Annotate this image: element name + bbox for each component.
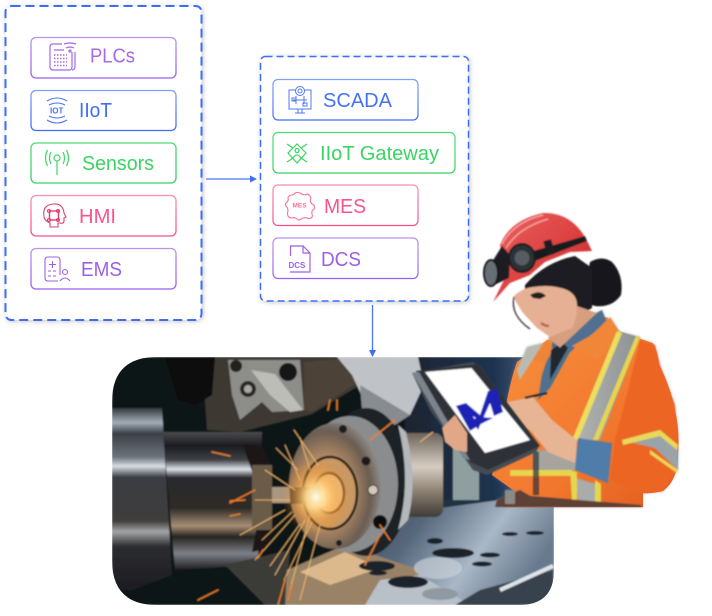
forearm and hand [503, 397, 577, 463]
rear hub [406, 432, 444, 518]
icon: calculator user [45, 257, 70, 281]
large cylinders [112, 408, 172, 590]
hair [525, 256, 592, 320]
pill: IIoT Gateway [273, 132, 455, 173]
machine head [203, 357, 362, 432]
panel: control systems [260, 56, 468, 301]
face [513, 286, 577, 337]
arrow: field devices to control systems [206, 176, 257, 182]
left strap [517, 343, 543, 380]
icon: MES gear: MES [292, 202, 307, 210]
worker body [492, 310, 679, 507]
collar and shirt [538, 310, 607, 400]
arrow: control systems to machine [369, 305, 376, 357]
head [484, 213, 622, 348]
label: PLCs: PLCs [90, 46, 135, 68]
label: DCS: DCS [321, 249, 361, 271]
icon: gateway [287, 144, 307, 163]
table plate [374, 499, 554, 602]
icon: DCS file [288, 246, 310, 272]
icon: SCADA monitor [289, 86, 311, 113]
sleeve [610, 340, 678, 493]
tablet [412, 362, 540, 475]
chest strap [572, 331, 640, 440]
icon: IoT waves [47, 98, 67, 123]
background right [404, 357, 523, 500]
hair bun [582, 258, 622, 306]
lower bed [225, 550, 290, 605]
sparks [240, 430, 320, 600]
icon: PLC keypad [50, 43, 76, 70]
left hand [442, 415, 467, 452]
pill: MES [273, 185, 418, 226]
cuff [575, 438, 612, 483]
glow [283, 460, 346, 532]
label: SCADA: SCADA [323, 90, 393, 112]
label: MES: MES [324, 196, 366, 218]
icon: IoT waves: IOT [50, 106, 63, 116]
pen [525, 393, 547, 398]
spindle ring [346, 407, 406, 557]
pill: PLCs [31, 38, 176, 78]
goggles [509, 244, 535, 272]
pill: HMI [31, 196, 176, 236]
label: Sensors: Sensors [82, 153, 154, 175]
label: IIoT: IIoT [79, 100, 112, 122]
photo: CNC machine with sparks [112, 357, 554, 605]
disc face [289, 423, 381, 549]
pill: IIoT [31, 90, 176, 130]
figure: engineer with tablet [412, 213, 679, 507]
icon: MES gear [286, 192, 314, 220]
icon: DCS file: DCS [288, 261, 306, 270]
pill: EMS [31, 248, 176, 289]
panel: field devices [6, 6, 202, 320]
plate holes [359, 531, 544, 588]
hard hat [493, 213, 592, 302]
label: EMS: EMS [81, 259, 122, 281]
icon: antenna [46, 150, 68, 175]
lower stripe [533, 450, 578, 470]
neck [548, 305, 597, 348]
pill: Sensors [31, 143, 176, 183]
belt [495, 490, 643, 507]
tablet logo [456, 389, 503, 431]
label: HMI: HMI [79, 206, 116, 228]
label: IIoT Gateway: IIoT Gateway [320, 143, 439, 165]
collar [243, 444, 274, 552]
pill: DCS [273, 238, 418, 278]
pill: SCADA [273, 80, 418, 120]
icon: head chip [44, 204, 66, 227]
